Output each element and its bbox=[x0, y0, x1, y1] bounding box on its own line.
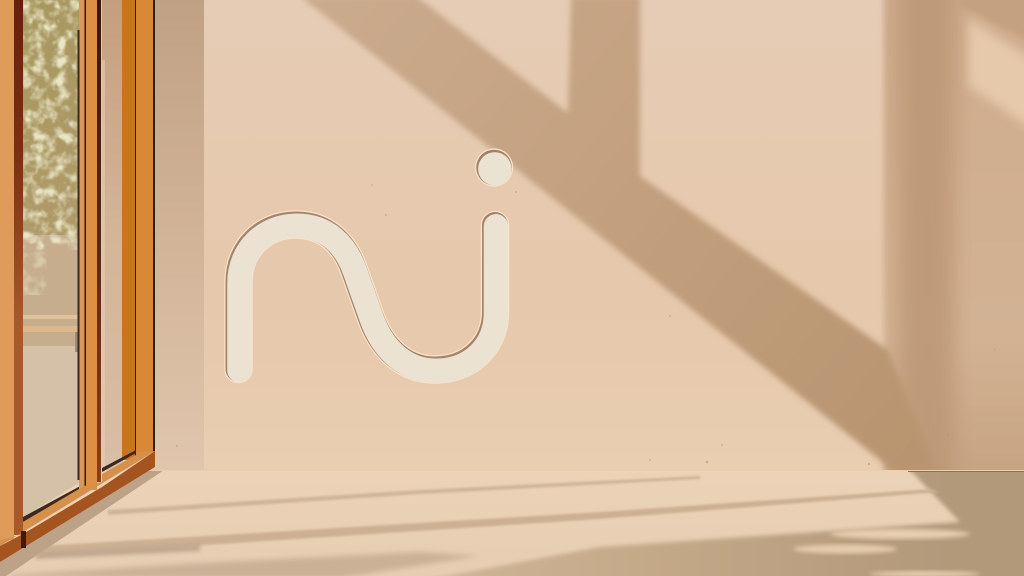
floor bbox=[0, 467, 1024, 576]
floor shadow: wedge along the sill bbox=[0, 467, 167, 576]
centre post bbox=[78, 0, 101, 490]
wall base line bbox=[908, 471, 1024, 472]
tree foliage bbox=[23, 0, 79, 250]
sill joint bbox=[21, 531, 26, 548]
floor shadow: middle line bbox=[40, 489, 940, 556]
logo wave bbox=[238, 224, 496, 371]
window frame bbox=[0, 0, 155, 562]
left post bbox=[0, 0, 23, 540]
floor shadow: bottom left streak bbox=[10, 552, 480, 576]
light patch: floor right bottom bbox=[870, 571, 980, 576]
logo: recessed wave with dot bbox=[238, 148, 513, 371]
sill top bbox=[0, 451, 155, 546]
glass bottom edge bbox=[23, 486, 79, 522]
logo dot bbox=[475, 148, 513, 187]
outside building bbox=[23, 235, 78, 334]
right post bbox=[122, 0, 155, 466]
outside view through glass bbox=[23, 0, 79, 521]
tree lower foliage bbox=[23, 250, 47, 295]
floor shadow: right side bbox=[442, 472, 1024, 576]
light patch: upper right bbox=[968, 18, 1024, 135]
bench bbox=[23, 315, 79, 352]
wall speckles bbox=[176, 184, 996, 465]
wall bbox=[155, 0, 1024, 472]
wall shadows: window light pattern bbox=[300, 0, 1024, 490]
inner glass bottom edge bbox=[102, 450, 136, 472]
light patch: floor right upper bbox=[830, 529, 970, 539]
shadow: main diagonal beam bbox=[300, 0, 940, 480]
floor shadow: thin upper line bbox=[108, 476, 700, 515]
shadow: top right corner bbox=[964, 0, 1024, 37]
floor shadow: grey streak left bbox=[35, 544, 200, 559]
interior reveal between frames bbox=[102, 0, 123, 470]
outside pavement bbox=[23, 346, 79, 521]
shadow: right side wall bbox=[884, 0, 1024, 490]
sill front bbox=[0, 451, 155, 562]
shadow: dark vertical mullion bbox=[898, 0, 955, 490]
light patch: floor right lower bbox=[793, 544, 897, 554]
